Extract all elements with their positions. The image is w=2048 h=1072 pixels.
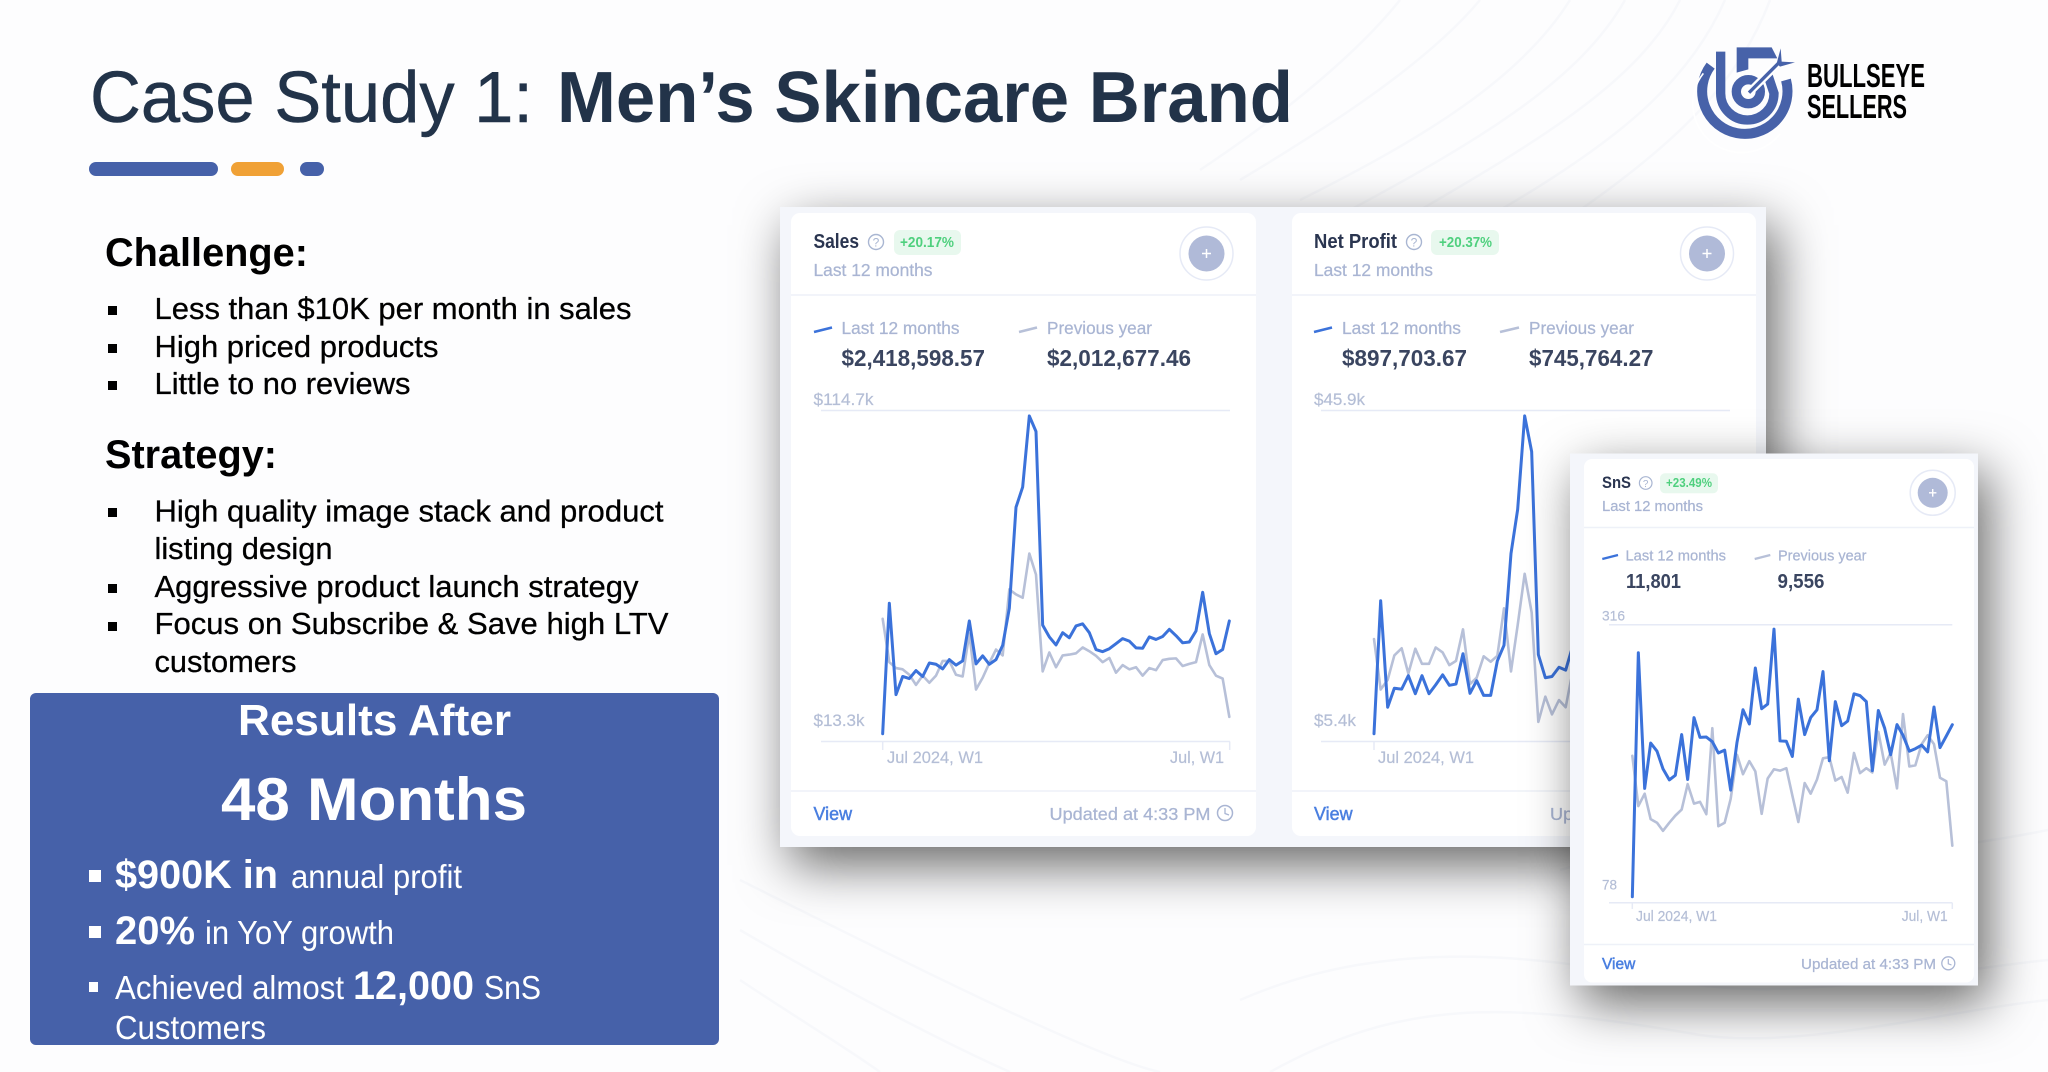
sns heading: Last 12 months bbox=[1602, 498, 1703, 515]
panel: sales card bbox=[791, 213, 1256, 836]
sns heading: +23.49% bbox=[1666, 476, 1712, 490]
strategy bullets: Focus on Subscribe & Save high LTV bbox=[154, 606, 669, 641]
sns legend bbox=[1602, 548, 1866, 593]
sales heading: +20.17% bbox=[900, 235, 954, 251]
panel: sns screenshot backing bbox=[1570, 454, 1978, 986]
net profit footer bbox=[1314, 803, 1711, 824]
sales heading bbox=[814, 230, 961, 280]
sales heading: Sales bbox=[814, 231, 859, 253]
challenge bullets: Less than $10K per month in sales bbox=[154, 291, 632, 326]
sales legend: $2,418,598.57 bbox=[842, 345, 985, 371]
sns line chart: 316 bbox=[1602, 608, 1625, 624]
net profit legend bbox=[1314, 318, 1654, 371]
strategy bullets: customers bbox=[154, 644, 296, 679]
net profit legend: Previous year bbox=[1529, 318, 1634, 338]
panel: challenge bbox=[105, 231, 632, 401]
results heading: Results After bbox=[238, 696, 511, 745]
result: annual profit: $900K in bbox=[115, 853, 278, 897]
sns legend: 11,801 bbox=[1626, 571, 1681, 593]
challenge bullets: High priced products bbox=[154, 329, 438, 364]
sns line chart bbox=[1602, 608, 1952, 925]
sales line chart bbox=[814, 390, 1230, 767]
icon: add button bbox=[1680, 227, 1734, 280]
net profit legend: $897,703.67 bbox=[1342, 345, 1467, 371]
net profit legend: $745,764.27 bbox=[1529, 345, 1654, 371]
result: yoy growth: in YoY growth bbox=[205, 914, 394, 951]
title: Case Study 1: bbox=[90, 58, 533, 138]
title accent bars bbox=[89, 162, 324, 176]
result: sns customers: Customers bbox=[115, 1009, 266, 1046]
icon: bullseye target with arrow bbox=[1693, 47, 1795, 153]
strategy bullets bbox=[108, 494, 669, 679]
challenge heading: Challenge: bbox=[105, 231, 308, 275]
panel: strategy bbox=[105, 433, 669, 679]
sns legend: 9,556 bbox=[1778, 571, 1824, 593]
strategy heading: Strategy: bbox=[105, 433, 277, 477]
sales footer: View bbox=[814, 803, 853, 824]
panel: results bbox=[30, 693, 719, 1046]
sns legend: Last 12 months bbox=[1626, 548, 1726, 564]
sns footer bbox=[1602, 956, 1955, 973]
panel: sns card bbox=[1584, 459, 1974, 982]
sales legend bbox=[814, 318, 1191, 371]
net profit line chart bbox=[1314, 390, 1730, 767]
sales legend: Last 12 months bbox=[842, 318, 960, 338]
sales line chart: $13.3k bbox=[814, 711, 865, 730]
sales heading: ? bbox=[873, 236, 880, 250]
net profit line chart: Jul 2024, W1 bbox=[1378, 748, 1474, 767]
title: Men’s Skincare Brand bbox=[557, 58, 1293, 138]
net profit legend: Last 12 months bbox=[1342, 318, 1461, 338]
net profit line chart: $5.4k bbox=[1314, 711, 1356, 730]
net profit heading: +20.37% bbox=[1439, 235, 1492, 251]
result: sns customers: 12,000 bbox=[353, 964, 474, 1008]
panel: net profit card bbox=[1292, 213, 1756, 836]
sales legend: Previous year bbox=[1047, 318, 1152, 338]
sns legend: Previous year bbox=[1778, 548, 1866, 564]
sales footer: Updated at 4:33 PM bbox=[1050, 804, 1210, 824]
icon: add button bbox=[1910, 470, 1955, 515]
net profit heading: Net Profit bbox=[1314, 231, 1397, 253]
result: sns customers: SnS bbox=[484, 969, 541, 1006]
result: yoy growth bbox=[89, 909, 394, 953]
result: yoy growth: 20% bbox=[115, 909, 195, 953]
result: sns customers bbox=[89, 964, 541, 1046]
strategy bullets: High quality image stack and product bbox=[154, 494, 664, 528]
net profit line chart: $45.9k bbox=[1314, 390, 1365, 409]
sns footer: View bbox=[1602, 956, 1636, 973]
sales legend: $2,012,677.46 bbox=[1047, 345, 1191, 371]
result: annual profit bbox=[89, 853, 462, 897]
logo wordmark: SELLERS bbox=[1807, 89, 1907, 126]
net profit footer: Updated at 4:33 PM bbox=[1550, 804, 1711, 824]
challenge bullets: Little to no reviews bbox=[154, 366, 410, 401]
net profit heading: Last 12 months bbox=[1314, 260, 1433, 280]
strategy bullets: listing design bbox=[154, 531, 332, 566]
strategy bullets: Aggressive product launch strategy bbox=[154, 569, 639, 604]
title bbox=[90, 58, 1293, 138]
logo wordmark bbox=[1807, 58, 1925, 126]
net profit footer: View bbox=[1314, 803, 1353, 824]
results duration: 48 Months bbox=[221, 766, 527, 833]
sales footer bbox=[814, 803, 1232, 824]
sales line chart: Jul, W1 bbox=[1170, 748, 1224, 767]
net profit heading: ? bbox=[1411, 236, 1418, 250]
sns heading: SnS bbox=[1602, 473, 1631, 492]
sns footer: Updated at 4:33 PM bbox=[1801, 956, 1936, 973]
challenge bullets bbox=[108, 291, 632, 401]
sales heading: Last 12 months bbox=[814, 260, 933, 280]
result: sns customers: Achieved almost bbox=[115, 969, 344, 1006]
sales line chart: $114.7k bbox=[814, 390, 874, 409]
logo: Bullseye Sellers bbox=[1693, 47, 1925, 153]
sns heading: ? bbox=[1643, 479, 1649, 490]
net profit heading bbox=[1314, 230, 1499, 280]
sns heading bbox=[1602, 473, 1718, 515]
sales line chart: Jul 2024, W1 bbox=[887, 748, 983, 767]
sns line chart: Jul 2024, W1 bbox=[1636, 909, 1717, 925]
logo wordmark: BULLSEYE bbox=[1807, 58, 1925, 95]
icon: add button bbox=[1180, 227, 1233, 280]
sns line chart: 78 bbox=[1602, 876, 1617, 892]
sns line chart: Jul, W1 bbox=[1902, 909, 1948, 925]
result: annual profit: annual profit bbox=[291, 858, 462, 895]
panel: dashboard screenshot backing bbox=[780, 207, 1766, 847]
